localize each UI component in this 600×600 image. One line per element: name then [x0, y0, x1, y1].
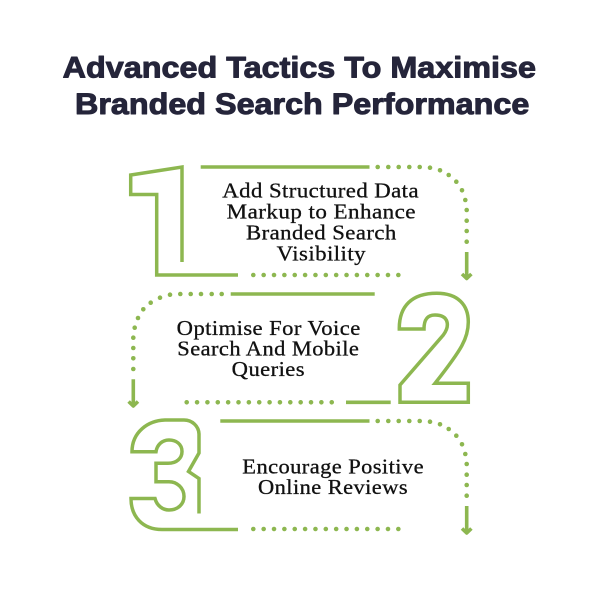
dotted bottom line	[187, 400, 332, 405]
bottom connector line	[346, 400, 391, 404]
number 1 outline	[131, 167, 238, 275]
top connector line	[201, 165, 370, 169]
step 3 text: Encourage Positive	[242, 454, 424, 478]
top connector line	[231, 292, 375, 296]
step 1 text: Branded Search	[246, 220, 397, 244]
dotted curve to arrow	[131, 292, 224, 371]
number 2 outline	[399, 293, 468, 402]
step 1 text: Visibility	[277, 241, 366, 265]
dotted bottom line	[253, 273, 399, 277]
top connector line	[220, 419, 370, 423]
title: Advanced Tactics To Maximise	[63, 51, 536, 84]
panel: step 1	[131, 165, 471, 278]
step 2 text	[177, 316, 361, 381]
step 3 text: Online Reviews	[258, 475, 408, 499]
arrow down	[129, 379, 138, 406]
arrow down	[462, 252, 471, 278]
step 3 text	[242, 454, 424, 499]
title	[63, 51, 536, 121]
step 2 text: Optimise For Voice	[177, 316, 361, 340]
title: Branded Search Performance	[75, 88, 529, 121]
dotted bottom line	[253, 527, 399, 531]
step 2 text: Queries	[232, 357, 305, 381]
dotted curve to arrow	[375, 165, 469, 244]
step 1 text: Markup to Enhance	[227, 199, 416, 223]
dotted curve to arrow	[375, 419, 469, 498]
step 2 text: Search And Mobile	[177, 337, 359, 361]
step 1 text: Add Structured Data	[222, 178, 419, 202]
arrow down	[462, 506, 471, 533]
panel: step 2	[129, 292, 468, 406]
panel: step 3	[131, 419, 471, 533]
number 3 outline	[131, 420, 238, 530]
step 1 text	[222, 178, 419, 265]
